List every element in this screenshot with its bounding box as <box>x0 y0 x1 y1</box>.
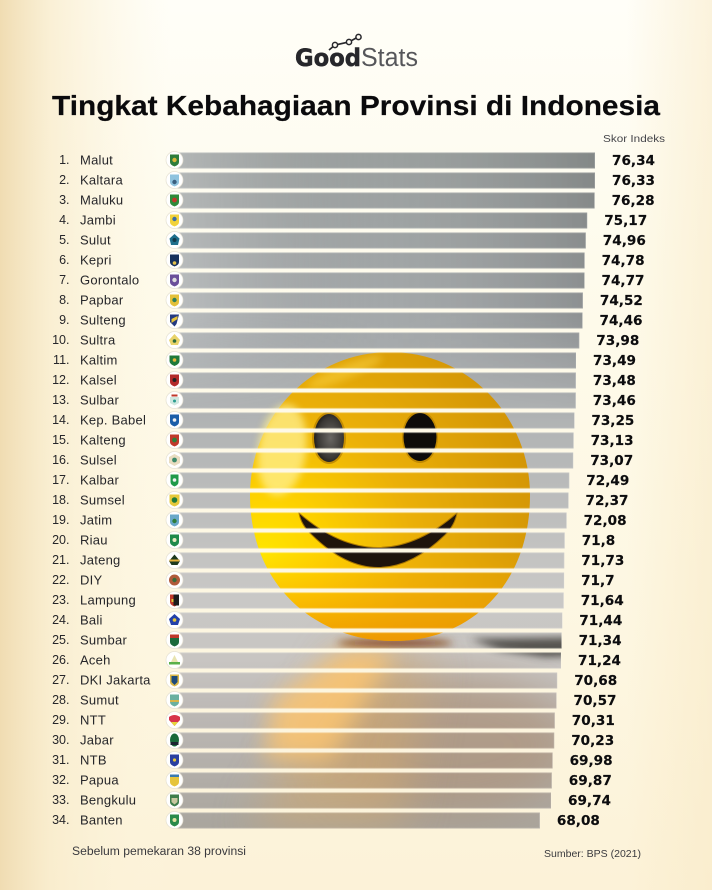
row 3: Maluku <box>59 192 655 209</box>
row 11: Kaltim: Kaltim <box>80 352 118 368</box>
row 30: Jabar: 70,23 <box>571 733 614 749</box>
row 34: Banten: 68,08 <box>557 813 600 829</box>
column header: Skor Indeks: Skor Indeks <box>603 133 665 145</box>
row 1: Malut: 1. <box>59 153 70 167</box>
row 11: Kaltim: 11. <box>53 353 70 367</box>
row 26: Aceh <box>52 652 621 669</box>
row 5: Sulut: Sulut <box>80 232 111 248</box>
row 20: Riau: Riau <box>80 532 108 548</box>
row 25: Sumbar: 25. <box>52 633 70 647</box>
icon: Sulut crest <box>166 232 183 248</box>
row 16: Sulsel <box>52 452 633 469</box>
row 33: Bengkulu: 33. <box>52 793 70 807</box>
icon: Kepri crest <box>166 252 183 268</box>
row 21: Jateng: Jateng <box>80 552 121 568</box>
row 6: Kepri <box>59 252 645 269</box>
row 12: Kalsel <box>52 372 636 389</box>
row 2: Kaltara: 2. <box>59 173 70 187</box>
row 16: Sulsel: Sulsel <box>80 452 117 468</box>
icon: Sumut crest <box>166 692 183 708</box>
row 29: NTT <box>52 712 615 729</box>
icon: Papbar crest <box>166 292 183 308</box>
row 26: Aceh: 71,24 <box>578 653 621 669</box>
icon: Jabar crest <box>166 732 183 748</box>
row 19: Jatim: Jatim <box>80 512 112 528</box>
row 2: Kaltara: 76,33 <box>612 173 655 189</box>
row 18: Sumsel <box>52 492 628 509</box>
logo: GoodStats: Stats <box>361 44 418 72</box>
row 6: Kepri: 6. <box>59 253 70 267</box>
row 30: Jabar <box>52 732 614 749</box>
row 13: Sulbar <box>52 392 636 409</box>
row 34: Banten <box>52 812 600 829</box>
row 19: Jatim: 72,08 <box>584 513 627 529</box>
icon: Banten crest <box>166 812 183 828</box>
row 23: Lampung: 71,64 <box>581 593 624 609</box>
row 28: Sumut: 28. <box>52 693 70 707</box>
row 22: DIY: 71,7 <box>581 573 615 589</box>
icon: Jatim crest <box>166 512 183 528</box>
icon: Lampung crest <box>166 592 183 608</box>
row 21: Jateng <box>52 552 624 569</box>
row 31: NTB: 31. <box>52 753 70 767</box>
row 18: Sumsel: 72,37 <box>586 493 628 509</box>
row 19: Jatim: 19. <box>52 513 70 527</box>
row 8: Papbar: Papbar <box>80 292 124 308</box>
icon: Kaltim crest <box>166 352 183 368</box>
icon: Sumsel crest <box>166 492 183 508</box>
row 23: Lampung: Lampung <box>80 592 136 608</box>
row 31: NTB: NTB <box>80 752 107 768</box>
row 13: Sulbar: Sulbar <box>80 392 119 408</box>
row 1: Malut: 76,34 <box>612 153 655 169</box>
row 32: Papua: 32. <box>52 773 70 787</box>
icon: NTT crest <box>166 712 183 728</box>
row 10: Sultra <box>52 332 639 349</box>
row 6: Kepri: Kepri <box>80 252 112 268</box>
row 21: Jateng: 21. <box>52 553 70 567</box>
row 29: NTT: NTT <box>80 712 106 728</box>
icon: Sultra crest <box>166 332 183 348</box>
row 18: Sumsel: 18. <box>52 493 70 507</box>
icon: Aceh crest <box>166 652 183 668</box>
row 11: Kaltim: 73,49 <box>593 353 636 369</box>
row 9: Sulteng: 9. <box>59 313 70 327</box>
title: Tingkat Kebahagiaan Provinsi di Indonesia <box>52 90 660 121</box>
bar chart fill: smiley photo seen through the bars <box>165 145 605 835</box>
logo: GoodStats: Good <box>295 44 361 72</box>
row 20: Riau: 20. <box>52 533 70 547</box>
row 4: Jambi: 75,17 <box>604 213 647 229</box>
row 21: Jateng: 71,73 <box>581 553 624 569</box>
row 16: Sulsel: 73,07 <box>590 453 633 469</box>
row 3: Maluku: 76,28 <box>612 193 655 209</box>
row 18: Sumsel: Sumsel <box>80 492 125 508</box>
icon: DIY crest <box>166 572 183 588</box>
row 24: Bali: Bali <box>80 612 103 628</box>
row 7: Gorontalo: Gorontalo <box>80 272 139 288</box>
row 23: Lampung <box>52 592 624 609</box>
icon: Maluku crest <box>166 192 183 208</box>
row 13: Sulbar: 73,46 <box>593 393 636 409</box>
row 27: DKI Jakarta: DKI Jakarta <box>80 672 151 688</box>
icon: Papua crest <box>166 772 183 788</box>
row 10: Sultra: 73,98 <box>596 333 639 349</box>
source: Sumber: BPS (2021) <box>544 848 641 860</box>
row 8: Papbar <box>59 292 643 309</box>
icon: Kalteng crest <box>166 432 183 448</box>
row 5: Sulut: 5. <box>59 233 70 247</box>
icon: Kaltara crest <box>166 172 183 188</box>
row 3: Maluku: 3. <box>59 193 70 207</box>
row 27: DKI Jakarta <box>52 672 617 689</box>
row 20: Riau: 71,8 <box>582 533 615 549</box>
row 14: Kep. Babel: 14. <box>52 413 70 427</box>
row 6: Kepri: 74,78 <box>602 253 645 269</box>
row 19: Jatim <box>52 512 627 529</box>
row 9: Sulteng: Sulteng <box>80 312 126 328</box>
row 5: Sulut: 74,96 <box>603 233 646 249</box>
row 20: Riau <box>52 532 615 549</box>
icon: Kalsel crest <box>166 372 183 388</box>
row 22: DIY: 22. <box>52 573 70 587</box>
row 29: NTT: 29. <box>52 713 70 727</box>
row 29: NTT: 70,31 <box>572 713 615 729</box>
row 17: Kalbar: 17. <box>52 473 70 487</box>
footnote: Sebelum pemekaran 38 provinsi <box>72 846 246 858</box>
row 17: Kalbar <box>52 472 629 489</box>
row 27: DKI Jakarta: 27. <box>52 673 70 687</box>
row 1: Malut <box>59 152 655 169</box>
row 33: Bengkulu: Bengkulu <box>80 792 136 808</box>
row 3: Maluku: Maluku <box>80 192 123 208</box>
row 33: Bengkulu: 69,74 <box>568 793 611 809</box>
icon: Gorontalo crest <box>166 272 183 288</box>
row 25: Sumbar: Sumbar <box>80 632 127 648</box>
icon: Bali crest <box>166 612 183 628</box>
row 32: Papua: Papua <box>80 772 119 788</box>
row 4: Jambi <box>59 212 647 229</box>
row 24: Bali: 71,44 <box>579 613 622 629</box>
row 12: Kalsel: 12. <box>52 373 70 387</box>
icon: DKI Jakarta crest <box>166 672 183 688</box>
icon: Kep. Babel crest <box>166 412 183 428</box>
row 33: Bengkulu <box>52 792 611 809</box>
row 27: DKI Jakarta: 70,68 <box>574 673 617 689</box>
row 7: Gorontalo: 7. <box>59 273 70 287</box>
row 25: Sumbar <box>52 632 622 649</box>
row 22: DIY <box>52 572 615 589</box>
row 26: Aceh: 26. <box>52 653 70 667</box>
row 24: Bali <box>52 612 622 629</box>
row 4: Jambi: 4. <box>59 213 70 227</box>
row 9: Sulteng: 74,46 <box>600 313 642 329</box>
icon: Malut crest <box>166 152 183 168</box>
row 17: Kalbar: 72,49 <box>586 473 629 489</box>
row 7: Gorontalo <box>59 272 644 289</box>
row 12: Kalsel: 73,48 <box>593 373 636 389</box>
row 28: Sumut: 70,57 <box>574 693 616 709</box>
icon: Sulteng crest <box>166 312 183 328</box>
row 28: Sumut: Sumut <box>80 692 119 708</box>
row 7: Gorontalo: 74,77 <box>602 273 644 289</box>
row 34: Banten: 34. <box>52 813 70 827</box>
row 8: Papbar: 8. <box>59 293 70 307</box>
row 14: Kep. Babel: Kep. Babel <box>80 412 146 428</box>
row 14: Kep. Babel: 73,25 <box>591 413 634 429</box>
icon: Jateng crest <box>166 552 183 568</box>
row 1: Malut: Malut <box>80 152 113 168</box>
row 10: Sultra: Sultra <box>80 332 116 348</box>
logo: GoodStats <box>295 34 418 72</box>
row 25: Sumbar: 71,34 <box>579 633 622 649</box>
icon: Bengkulu crest <box>166 792 183 808</box>
row 15: Kalteng: Kalteng <box>80 432 126 448</box>
row 30: Jabar: 30. <box>52 733 70 747</box>
row 10: Sultra: 10. <box>52 333 70 347</box>
row 26: Aceh: Aceh <box>80 652 111 668</box>
row 8: Papbar: 74,52 <box>600 293 643 309</box>
icon: Sulsel crest <box>166 452 183 468</box>
row 11: Kaltim <box>53 352 636 369</box>
row 15: Kalteng: 73,13 <box>591 433 634 449</box>
icon: Kalbar crest <box>166 472 183 488</box>
row 2: Kaltara <box>59 172 655 189</box>
icon: NTB crest <box>166 752 183 768</box>
row 4: Jambi: Jambi <box>80 212 116 228</box>
icon: Jambi crest <box>166 212 183 228</box>
row 9: Sulteng <box>59 312 642 329</box>
icon: Sulbar crest <box>166 392 183 408</box>
row 5: Sulut <box>59 232 646 249</box>
row 14: Kep. Babel <box>52 412 634 429</box>
row 13: Sulbar: 13. <box>52 393 70 407</box>
row 34: Banten: Banten <box>80 812 123 828</box>
icon: Riau crest <box>166 532 183 548</box>
row 30: Jabar: Jabar <box>80 732 114 748</box>
row 31: NTB <box>52 752 613 769</box>
row 17: Kalbar: Kalbar <box>80 472 119 488</box>
row 28: Sumut <box>52 692 616 709</box>
row 32: Papua <box>52 772 612 789</box>
row 23: Lampung: 23. <box>52 593 70 607</box>
row 15: Kalteng <box>52 432 634 449</box>
icon: Sumbar crest <box>166 632 183 648</box>
row 24: Bali: 24. <box>52 613 70 627</box>
row 22: DIY: DIY <box>80 572 102 588</box>
row 2: Kaltara: Kaltara <box>80 172 123 188</box>
row 16: Sulsel: 16. <box>52 453 70 467</box>
row 31: NTB: 69,98 <box>570 753 613 769</box>
row 12: Kalsel: Kalsel <box>80 372 117 388</box>
row 15: Kalteng: 15. <box>52 433 70 447</box>
row 32: Papua: 69,87 <box>569 773 612 789</box>
